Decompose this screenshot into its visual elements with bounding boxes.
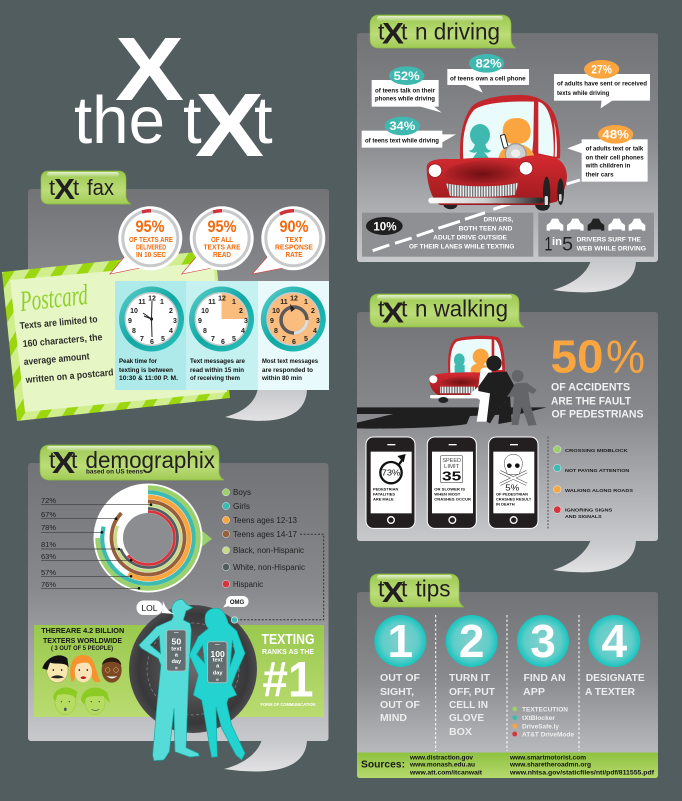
clock: responded within 80 min: 4: [313, 328, 317, 335]
phone: speed limit 35: OR SLOWER IS: [434, 487, 465, 492]
clock captions: Most text messages: [262, 358, 318, 365]
text: #1 form of communication: #1: [262, 652, 314, 708]
callout: 48%: 48%: [602, 128, 629, 142]
panel: tXt tips: [357, 574, 658, 778]
tip 1: [374, 615, 426, 724]
legend: walking: WALKING ALONG ROADS: [565, 488, 634, 494]
phone: speed limit 35: WHEN MOST: [434, 492, 461, 497]
green stats band: [34, 625, 324, 717]
stat: 50% of accidents: [550, 330, 645, 420]
clock: read within 15 min: 1: [232, 299, 236, 306]
clock: responded within 80 min: 6: [292, 339, 296, 346]
heading: tXt n driving: n driving: [415, 18, 500, 44]
speech bubble: LOL: [136, 600, 175, 615]
app list: TEXTECUTION: [522, 706, 568, 714]
postcard text: 160 characters, the: [22, 332, 103, 350]
phone: 100 text a day: a: [216, 663, 220, 669]
clock captions: 10:30 & 11:00 P. M.: [119, 375, 178, 382]
dark circle backdrop: [129, 605, 257, 733]
phone: 5% death: OF PEDESTRIAN: [496, 492, 528, 497]
phones and legend: [366, 437, 634, 529]
text: 1 in 5: in: [552, 236, 562, 248]
heading: tXt tips: t: [378, 576, 385, 602]
phone: 50 text a day: text: [171, 647, 181, 653]
heading: tXt tips: tips: [416, 576, 450, 602]
legend: Girls: [233, 502, 250, 511]
tip 4: DESIGNATE: [586, 672, 645, 684]
sources footer: www.monash.edu.au: [409, 762, 475, 769]
phone: 73% male: PEDESTRIAN: [373, 487, 398, 492]
legend: Black, non-Hispanic: [233, 546, 304, 555]
chart labels: 67%: [41, 510, 56, 519]
clock: read within 15 min: 11: [208, 299, 216, 306]
clock: peak time: 10: [130, 308, 138, 315]
app list: AT&T DriveMode: [522, 732, 574, 738]
phone: 5% death: IN DEATH: [496, 502, 515, 507]
text: web while driving: [577, 237, 646, 253]
text: #1 form of communication: TEXTING: [262, 632, 314, 648]
icons: five faces: [42, 655, 122, 715]
chart labels: 76%: [41, 580, 56, 589]
phone: 50 text a day: a: [175, 652, 179, 658]
stat bubble: 95% delivered: OF TEXTS ARE: [129, 237, 173, 244]
clock: read within 15 min: 4: [241, 328, 245, 335]
stat bubble: 90% response: [252, 206, 325, 274]
crash illustration: [357, 336, 547, 429]
heading: tXt demographix: t: [49, 447, 56, 473]
stat bubble: 95% read: [182, 206, 254, 274]
tip 2: [446, 615, 498, 738]
clock: peak time: 4: [169, 328, 173, 335]
text: web while driving: DRIVERS SURF THE: [577, 237, 641, 244]
clock captions: [119, 358, 318, 382]
legend: Boys: [233, 488, 251, 497]
car: [427, 95, 567, 211]
tip 1: 1: [388, 615, 413, 667]
tip 2: CELL IN: [449, 699, 488, 711]
callout: 52%: 52%: [394, 69, 420, 83]
dotted connector: [238, 534, 324, 620]
callout: 82%: [447, 54, 529, 93]
clock: read within 15 min: 2: [239, 308, 243, 315]
stat bubble: 95% delivered: [110, 206, 182, 274]
callout: 48%: their cars: [586, 171, 614, 178]
phone: 50 text a day: 50: [172, 637, 181, 647]
clock: peak time: 12: [148, 296, 156, 302]
bottom info boxes and road: [362, 180, 654, 257]
tip 3: 3: [530, 615, 556, 667]
clock: read within 15 min: 8: [203, 328, 207, 335]
clocks panel: [115, 281, 329, 390]
sources footer: [357, 752, 658, 778]
tip 4: [585, 615, 645, 698]
text: 4.2 billion texters: [41, 626, 124, 652]
figure: boy: [139, 600, 199, 761]
heading: tXt demographix: [40, 445, 224, 480]
clock: responded within 80 min: 5: [304, 336, 308, 343]
sources footer: www.nhtsa.gov/staticfiles/nti/pdf/811555.pdf: [509, 769, 655, 776]
grille: [446, 183, 518, 197]
sources footer: Sources:: [361, 758, 405, 770]
tip 3: APP: [523, 686, 545, 698]
face: green girl: [81, 687, 110, 715]
legend: Hispanic: [233, 580, 263, 589]
tip 2: OFF, PUT: [449, 686, 496, 698]
stat bubble: 95% read: OF ALL: [211, 237, 234, 244]
callouts and stats: [362, 54, 650, 182]
clock: read within 15 min: 3: [244, 318, 248, 325]
stat: 10% drivers and 1 in 5: [366, 217, 646, 256]
text: 4.2 billion texters: ( 3 OUT OF 5 PEOPLE): [51, 646, 113, 652]
sources footer: www.smartmotorist.com: [509, 755, 586, 762]
clock: responded within 80 min: 11: [280, 299, 288, 306]
side wheels: [543, 177, 564, 210]
stat: 50% of accidents: 50: [550, 330, 604, 382]
callout: 52%: phones while driving: [375, 96, 435, 103]
clock: responded within 80 min: 1: [304, 299, 308, 306]
icons: five cars: [547, 219, 645, 231]
text: 1 in 5: [544, 235, 573, 256]
callout: 48%: [567, 125, 648, 182]
text: #1 form of communication: [260, 632, 316, 708]
figures: boy and girl: [139, 600, 245, 761]
face: brown: [102, 657, 122, 683]
phone: 100 text a day: [208, 642, 227, 683]
pedestrian: white: [470, 367, 492, 422]
clock: read within 15 min: 5: [232, 336, 236, 343]
heading: tXt demographix: demographix: [86, 447, 215, 473]
phone: speed limit 35: [427, 437, 476, 528]
clock: responded within 80 min: 10: [272, 308, 280, 315]
phone: 100 text a day: day: [213, 670, 223, 676]
postcard text: [19, 314, 114, 386]
stat: 50% of accidents: %: [606, 330, 645, 382]
clock captions: within 80 min: [261, 375, 302, 382]
callout: 82%: of teens own a cell phone: [450, 76, 526, 83]
text: lanes: OF THEIR LANES WHILE TEXTING: [409, 244, 514, 251]
legend: walking: AND SIGNALS: [565, 514, 602, 520]
face: orange hair: [70, 655, 101, 682]
callout: 34%: [362, 117, 456, 148]
callout: 27%: [554, 60, 650, 108]
clock: read within 15 min: 9: [198, 318, 202, 325]
postcard text: average amount: [23, 351, 91, 368]
pedestrian: gray: [507, 370, 537, 426]
phone: 100 text a day: text: [213, 658, 223, 664]
clock: read within 15 min: [189, 286, 254, 352]
stat bubble: 95% delivered: DELIVERED: [136, 244, 166, 252]
stat bubble: 90% response: RESPONSE: [275, 244, 313, 252]
postcard text: written on a postcard: [24, 367, 114, 386]
clock: responded within 80 min: 7: [282, 336, 286, 343]
phone: 50 text a day: day: [171, 659, 182, 665]
title: the: [74, 83, 165, 158]
clock: peak time: 11: [138, 299, 146, 306]
clock: responded within 80 min: 2: [311, 308, 315, 315]
face: black hair: [42, 655, 69, 683]
donut chart: [94, 484, 212, 592]
clock: read within 15 min: 10: [201, 308, 209, 315]
tip 1: OUT OF: [380, 699, 421, 711]
clock: peak time: 6: [150, 339, 154, 346]
tip 4: 4: [602, 615, 628, 667]
phone: 50 text a day: [167, 630, 186, 671]
passenger: [468, 124, 491, 160]
stat bubble: 95% delivered: IN 10 SEC: [136, 252, 166, 259]
phone: 100 text a day: 100: [210, 649, 225, 659]
legend: Teens ages 14-17: [233, 530, 298, 539]
app list: tXtBlocker: [522, 715, 555, 722]
heading: tXt tips: X: [382, 577, 405, 609]
callout: 48%: of adults text or talk: [586, 146, 644, 153]
bumper: [428, 198, 543, 203]
face: green boy: [53, 687, 77, 715]
tip 3: [512, 615, 574, 738]
heading: tXt fax: t: [73, 175, 79, 200]
phone: 5% death: [489, 437, 538, 528]
figure: girl: [189, 608, 245, 760]
badge: 10%: 10%: [373, 220, 397, 234]
speech bubble: OMG: OMG: [230, 600, 244, 606]
front wheels: [443, 205, 550, 211]
tip 2: BOX: [449, 726, 472, 738]
callout: 82%: 82%: [476, 57, 502, 71]
text: lanes: [409, 217, 514, 251]
phone: 5% death: CRASHES RESULT: [496, 497, 532, 502]
clock captions: Peak time for: [119, 358, 157, 365]
phone: speed limit 35: LIMIT: [444, 464, 460, 470]
panel: tXt n driving: [357, 15, 658, 292]
clock: peak time: 1: [160, 299, 164, 306]
chart labels: [41, 496, 152, 590]
clock captions: Text messages are: [190, 358, 245, 365]
box: 1 in 5 drivers: [538, 213, 654, 257]
title: [74, 20, 273, 176]
sources footer: www.sharetheroadmn.org: [509, 762, 591, 769]
stat bubble: 95% read: TEXTS ARE: [204, 244, 241, 252]
heading: tXt n walking: [370, 294, 524, 330]
clock captions: of receiving them: [190, 375, 240, 382]
app list: [512, 706, 574, 738]
sources footer: www.distraction.gov: [409, 755, 473, 762]
clock: read within 15 min: 12: [218, 296, 226, 302]
stat bubble: 90% response: 90%: [280, 217, 308, 236]
callout: 48%: on their cell phones: [586, 155, 644, 162]
chart labels: 63%: [41, 552, 56, 561]
road dashes: [373, 180, 580, 251]
heading: tXt demographix: based on US teens: [86, 468, 143, 476]
heading: tXt n walking: t: [378, 296, 385, 322]
callout: 48%: with children in: [585, 163, 630, 170]
text: lanes: ADULT DRIVE OUTSIDE: [433, 235, 507, 242]
legend: walking: NOT PAYING ATTENTION: [565, 468, 630, 474]
tip 1: MIND: [380, 712, 407, 724]
clock: peak time: 9: [128, 318, 132, 325]
phone: 73% male: [366, 437, 415, 528]
heading: tXt fax: fax: [87, 175, 114, 200]
phone: speed limit 35: SPEED: [442, 458, 461, 464]
panel: tXt fax: [2, 171, 329, 421]
heading: tXt fax: t: [49, 175, 55, 200]
chart labels: 78%: [41, 523, 56, 532]
callout: 52%: of teens talk on their: [375, 88, 435, 95]
heading: tXt fax: X: [54, 174, 76, 206]
chart labels: 72%: [41, 496, 56, 505]
text: 4.2 billion texters: TEXTERS WORLDWIDE: [43, 636, 122, 645]
heading: tXt n walking: n walking: [415, 296, 508, 322]
heading: tXt fax: [41, 171, 131, 206]
callout: 34%: of teens text while driving: [365, 138, 439, 145]
legend: White, non-Hispanic: [233, 563, 305, 572]
heading: tXt n driving: [370, 15, 516, 50]
driver: [498, 118, 535, 176]
clock: read within 15 min: 6: [221, 339, 225, 346]
speech bubble: OMG: [223, 596, 248, 608]
heading: tXt tips: [370, 574, 464, 609]
text: #1 form of communication: RANKS AS THE: [262, 647, 314, 656]
clock: responded within 80 min: 3: [316, 318, 320, 325]
text: web while driving: WEB WHILE DRIVING: [577, 246, 646, 253]
stat: 50% of accidents: OF PEDESTRIANS: [552, 408, 644, 420]
clock: responded within 80 min: [261, 286, 326, 352]
clock: peak time: 2: [169, 308, 173, 315]
clock captions: texting is between: [119, 367, 173, 374]
legend: Teens ages 12-13: [233, 516, 298, 525]
stat bubble: 95% delivered: 95%: [136, 217, 164, 236]
teal connector dot: [231, 617, 238, 623]
tip 4: A TEXTER: [585, 686, 635, 698]
tip 2: GLOVE: [449, 712, 484, 724]
legend: walking: IGNORING SIGNS: [565, 508, 613, 514]
text: lanes: DRIVERS,: [484, 217, 514, 224]
text: 1 in 5: 5: [562, 235, 573, 256]
text: 4.2 billion texters: THEREARE 4.2 BILLION: [41, 626, 124, 635]
clock: peak time: 8: [132, 328, 136, 335]
heading: tXt n driving: t: [378, 18, 385, 44]
tip 2: 2: [459, 615, 484, 667]
clock: responded within 80 min: 12: [290, 296, 298, 302]
heading: tXt demographix: X: [52, 445, 75, 480]
phone: 73% male: ARE MALE: [373, 497, 394, 502]
phone: speed limit 35: 35: [442, 468, 462, 483]
tip 1: SIGHT,: [380, 686, 414, 698]
clock: peak time: 3: [173, 318, 177, 325]
speech bubble: LOL: LOL: [141, 603, 158, 613]
stat bubble: 95% read: READ: [213, 252, 231, 259]
pedestrian: black: [478, 356, 517, 424]
chart labels: 57%: [41, 568, 56, 577]
title: t: [183, 83, 202, 158]
phone: speed limit 35: CRASHES OCCUR: [434, 497, 471, 502]
legend: [222, 488, 305, 589]
callout: 27%: of adults have sent or received: [557, 81, 647, 88]
heading: tXt demographix: t: [71, 447, 78, 473]
postcard: [2, 250, 230, 421]
small car: [429, 336, 505, 403]
clock captions: are responded to: [262, 367, 313, 374]
clock: responded within 80 min: 9: [270, 318, 274, 325]
stat: 50% of accidents: OF ACCIDENTS: [551, 382, 630, 394]
stat bubble: 95% read: 95%: [208, 217, 236, 236]
panel: tXt demographix: [28, 445, 328, 771]
tip 1: OUT OF: [380, 672, 421, 684]
clock: read within 15 min: 7: [211, 336, 215, 343]
chart labels: 81%: [41, 540, 56, 549]
stat bubble: 90% response: RATE: [286, 252, 303, 259]
phone: 73% male: FATALITIES: [373, 492, 395, 497]
clock: peak time: 7: [140, 336, 144, 343]
badge: 10%: [366, 217, 403, 235]
title: X: [195, 76, 264, 176]
callout: 34%: 34%: [389, 119, 415, 133]
stat bubble: 90% response: TEXT: [286, 237, 303, 244]
title: X: [115, 20, 184, 120]
tip 3: FIND AN: [524, 672, 566, 684]
callout: 52%: [372, 66, 442, 113]
title: t: [254, 83, 273, 158]
clock: peak time: [119, 286, 184, 352]
postcard text: Texts are limited to: [19, 314, 98, 332]
legend: walking: CROSSING MIDBLOCK: [565, 448, 628, 454]
road: [357, 407, 547, 429]
steering wheel: [505, 144, 526, 164]
heading: tXt n driving: X: [382, 18, 404, 50]
heading: tXt n driving: t: [401, 18, 408, 44]
headlights: [428, 162, 533, 177]
stat: 50% of accidents: ARE THE FAULT: [551, 395, 631, 407]
heading: tXt tips: t: [401, 576, 408, 602]
text: lanes: BOTH TEEN AND: [459, 226, 513, 233]
app list: DriveSafe.ly: [522, 724, 559, 730]
box: 10% drivers: [362, 213, 533, 257]
postcard heading: Postcard: [18, 279, 90, 318]
callout: 27%: 27%: [591, 63, 612, 77]
heading: tXt n walking: t: [401, 296, 408, 322]
tip 2: TURN IT: [449, 672, 491, 684]
text: #1 form of communication: FORM OF COMMUNICATION: [260, 702, 316, 707]
heading: tXt n walking: X: [382, 298, 405, 330]
phone: 5% death: 5%: [505, 483, 520, 493]
sources footer: www.att.com/itcanwait: [409, 769, 483, 776]
phone: 73% male: 73%: [382, 468, 401, 478]
phone in hand: [500, 134, 508, 148]
text: 1 in 5: 1: [544, 235, 552, 256]
clock: peak time: 5: [161, 336, 165, 343]
clock captions: read within 15 min: [190, 367, 244, 374]
callout: 27%: texts while driving: [557, 90, 609, 97]
legend: walking: [554, 446, 634, 520]
clock: responded within 80 min: 8: [274, 328, 278, 335]
panel: tXt n walking: [357, 294, 658, 572]
